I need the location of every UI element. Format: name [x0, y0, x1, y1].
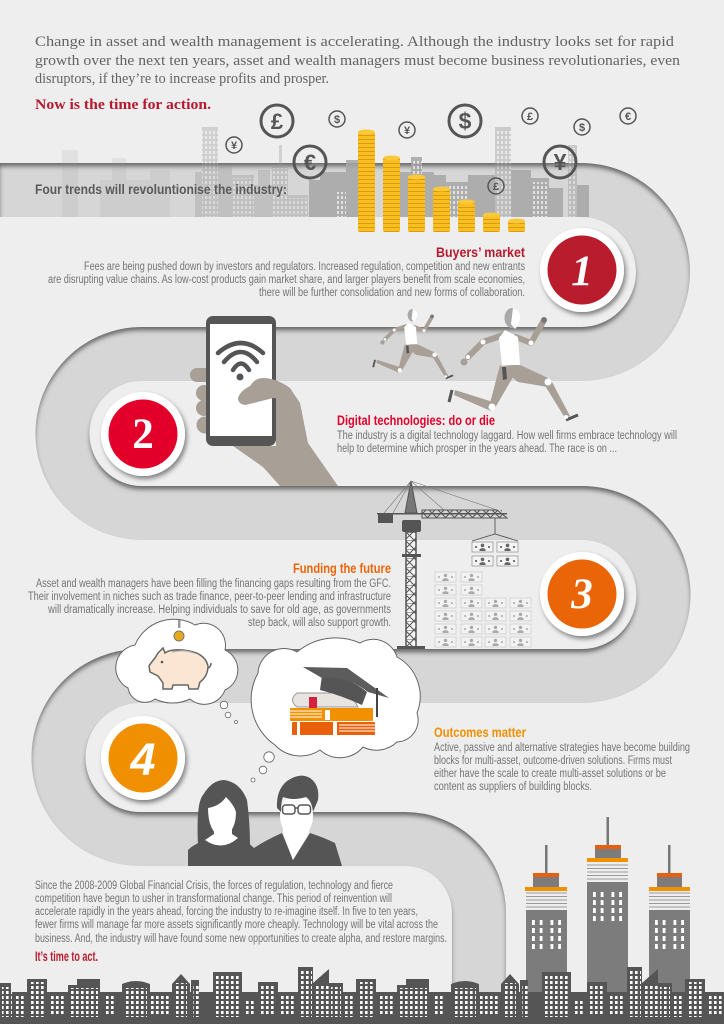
trend 4 text: Outcomes matter: Outcomes matter [434, 725, 527, 740]
currency icons: € [304, 150, 316, 175]
intro text: growth over the next ten years, asset and wealth managers must become business revolutionaries, even [35, 53, 681, 69]
currency icons [226, 105, 636, 194]
trend 3 text: Funding the future: Asset and wealth managers have been filling the financing gaps resulting from the GFC. [36, 578, 391, 590]
closing call to action: It’s time to act. [35, 949, 98, 964]
currency icons: € [625, 111, 631, 123]
currency icons: ¥ [554, 149, 567, 175]
trend 2 text: Digital technologies: help to determine which prosper in the years ahead. The race is on ... [337, 443, 617, 455]
closing text [35, 880, 447, 945]
currency icons: $ [459, 108, 472, 134]
closing text: accelerate rapidly in the years ahead, forcing the industry to re-imagine itself. In five to ten years, [35, 906, 418, 918]
trend 3 text: Funding the future [28, 561, 391, 629]
closing text: fewer firms will manage far more assets significantly more cheaply. Technology will be vital across the [35, 919, 438, 931]
trend 1 text: Buyers' market: are disrupting value chains. As low-cost products gain market share, and larger players benefit from scale economies, [48, 274, 525, 286]
currency icons: £ [493, 181, 499, 193]
trend 1 text: Buyers' market [48, 245, 525, 299]
closing text: Since the 2008-2009 Global Financial Crisis, the forces of regulation, technology and fierce [35, 880, 393, 892]
icon: construction crane lifting banknotes [377, 481, 531, 649]
section intro heading: Four trends will revoluntionise the industry: [35, 182, 287, 197]
call to action heading: Now is the time for action. [35, 97, 211, 113]
icon: three skyscrapers [525, 817, 690, 1004]
badge 4: 4 [129, 734, 156, 785]
trend 3 text: Funding the future: Funding the future [293, 561, 391, 576]
closing text: competition have begun to usher in transformational change. This period of reinvention will [35, 893, 392, 905]
badge 3: 3 [570, 571, 593, 618]
trend 3 text: Funding the future: step back, will also support growth. [248, 617, 391, 629]
trend 4 text: Outcomes matter: content as suppliers of building blocks. [434, 781, 592, 793]
trend 2 text: Digital technologies: Digital technologies: do or die [337, 413, 495, 428]
grey city skyline [62, 127, 589, 217]
badge 3 [540, 552, 624, 636]
trend 3 text: Funding the future: Their involvement in niches such as trade finance, peer-to-peer lending and infrastructure [28, 591, 391, 603]
badge 2: 2 [132, 411, 154, 458]
currency icons: $ [579, 122, 585, 134]
icon: large robot runner [449, 308, 578, 420]
trend 4 text: Outcomes matter: either have the scale to create multi-asset solutions or be [434, 768, 666, 780]
intro text: Change in asset and wealth management is accelerating. Although the industry looks set for rapid [35, 34, 675, 50]
currency icons: ¥ [231, 140, 238, 152]
icon: small robot runner [373, 309, 453, 378]
intro text: disruptors, if they’re to increase profits and prosper. [35, 71, 329, 87]
winding road [0, 190, 663, 1024]
badge 2 [101, 392, 185, 476]
currency icons: $ [334, 114, 340, 126]
badge 1: 1 [571, 248, 593, 295]
thought bubble: piggy bank [116, 619, 238, 724]
trend 4 text: Outcomes matter [434, 725, 690, 793]
trend 3 text: Funding the future: will dramatically increase. Helping individuals to save for old age, as governments [47, 604, 391, 616]
closing text: business. And, the industry will have found some new opportunities to create alpha, and restore margins. [35, 933, 447, 945]
icon: hand holding smartphone [190, 316, 338, 486]
trend 1 text: Buyers' market: there will be further consolidation and new forms of collaboration. [259, 287, 525, 299]
intro text [35, 34, 681, 87]
badge 4 [101, 716, 185, 800]
currency icons: ¥ [404, 125, 411, 137]
thought bubble: books and graduation cap [251, 638, 420, 782]
icon: woman and man [188, 776, 342, 866]
badge 1 [540, 228, 624, 312]
bar chart: falling coin stacks [358, 130, 525, 232]
trend 1 text: Buyers' market: Fees are being pushed down by investors and regulators. Increased regulation, competition and new entrants [84, 261, 525, 273]
trend 1 text: Buyers' market: Buyers’ market [436, 245, 525, 260]
currency icons: £ [271, 109, 284, 134]
trend 2 text: Digital technologies [337, 413, 677, 455]
dark city skyline [0, 967, 724, 1024]
currency icons: £ [527, 111, 533, 123]
